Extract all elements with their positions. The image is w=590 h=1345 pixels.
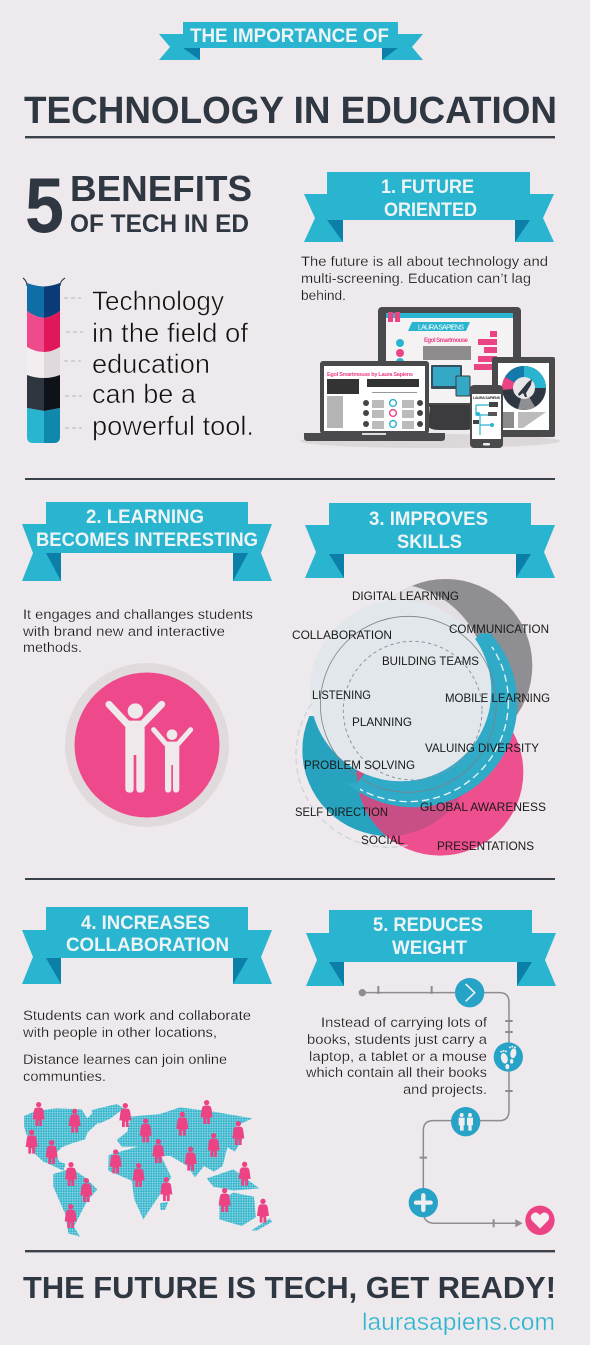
- ribbon: 5 reduces weight: 5. REDUCES: [373, 914, 483, 936]
- text: engages: with brand new and interactive: [22, 624, 225, 639]
- text: technology statement: education: [92, 349, 210, 379]
- skill labels: COLLABORATION: [292, 628, 392, 642]
- callout dashes: [64, 298, 83, 428]
- text: technology statement: [92, 286, 254, 441]
- ribbon: 1 future oriented: ORIENTED: [384, 199, 477, 221]
- ribbon: the importance of: [159, 22, 423, 60]
- phone: [470, 385, 503, 448]
- text: reduces weight: which contain all their books: [305, 1065, 487, 1080]
- phone: LAURA SAPIENS: [473, 396, 500, 400]
- footer website: laurasapiens.com: [362, 1309, 555, 1336]
- skill labels: LISTENING: [312, 688, 371, 702]
- ribbon: 4 increases collaboration: [22, 907, 272, 984]
- text: technology statement: Technology: [92, 286, 224, 316]
- text: collaboration: Distance learnes can join online: [23, 1052, 227, 1067]
- ribbon: 1 future oriented: [304, 172, 554, 242]
- laptop: Egol Smartmouse by Laura Sapiens: [327, 372, 413, 378]
- skill labels: [292, 589, 550, 853]
- ribbon: 3 improves skills: [305, 503, 555, 578]
- icon: two people: [451, 1107, 480, 1136]
- heading: 5 benefits of tech in ed: OF TECH IN ED: [70, 210, 249, 238]
- text: future: The future is all about technology and: [301, 254, 548, 269]
- laptop: [304, 361, 445, 441]
- devices illustration: [300, 307, 560, 448]
- icon: footprints: [494, 1042, 523, 1072]
- text: reduces weight: books, students just carry a: [307, 1032, 488, 1047]
- text: collaboration: communties.: [23, 1069, 106, 1084]
- skill labels: MOBILE LEARNING: [445, 691, 550, 705]
- ribbon: 5 reduces weight: [306, 910, 556, 986]
- text: technology statement: powerful tool.: [92, 411, 254, 441]
- ribbon: 1 future oriented: 1. FUTURE: [381, 176, 474, 198]
- ribbon: 4 increases collaboration: 4. INCREASES: [81, 912, 210, 934]
- monitor: LAURA SAPIENS: [418, 324, 464, 332]
- skill labels: SELF DIRECTION: [295, 805, 388, 819]
- ribbon: 5 reduces weight: WEIGHT: [392, 937, 467, 959]
- icon: chevron: [455, 978, 484, 1007]
- icon: parent and child: [65, 663, 229, 827]
- world map with people: [24, 1100, 272, 1237]
- heading: 5 benefits of tech in ed: [25, 161, 252, 249]
- text: collaboration: with people in other locations,: [22, 1025, 217, 1040]
- skill labels: VALUING DIVERSITY: [425, 741, 539, 755]
- ribbon: 3 improves skills: 3. IMPROVES: [369, 508, 488, 530]
- text: engages: It engages and challanges students: [23, 607, 253, 622]
- skill labels: PROBLEM SOLVING: [304, 758, 415, 772]
- text: reduces weight: laptop, a tablet or a mouse: [309, 1049, 487, 1064]
- text: engages: methods.: [23, 640, 82, 655]
- skill labels: COMMUNICATION: [449, 622, 549, 636]
- skill labels: PLANNING: [352, 715, 412, 729]
- skill labels: SOCIAL: [361, 833, 404, 847]
- text: future: [301, 254, 548, 303]
- ribbon: 3 improves skills: SKILLS: [397, 531, 462, 553]
- text: collaboration: Students can work and collaborate: [23, 1008, 251, 1023]
- text: reduces weight: and projects.: [403, 1082, 487, 1097]
- text: reduces weight: [305, 1015, 488, 1097]
- ribbon: 4 increases collaboration: COLLABORATION: [66, 934, 229, 956]
- icon: heart: [525, 1206, 555, 1235]
- text: engages: [22, 607, 253, 655]
- skill labels: DIGITAL LEARNING: [352, 589, 459, 603]
- text: technology statement: can be a: [92, 379, 197, 409]
- monitor: [378, 307, 521, 430]
- chart: skills venn diagram: [292, 579, 550, 856]
- skill labels: PRESENTATIONS: [437, 839, 534, 853]
- footer headline: THE FUTURE IS TECH, GET READY!: [23, 1270, 556, 1305]
- text: collaboration: [22, 1008, 251, 1084]
- icon: plus: [409, 1188, 438, 1217]
- title: TECHNOLOGY IN EDUCATION: [24, 90, 557, 132]
- ribbon: 2 learning becomes interesting: BECOMES INTERESTING: [36, 529, 258, 551]
- tablet: [492, 357, 555, 437]
- text: future: behind.: [301, 288, 346, 303]
- ribbon: the importance of: THE IMPORTANCE OF: [190, 25, 389, 47]
- heading: 5 benefits of tech in ed: BENEFITS: [70, 168, 252, 209]
- text: reduces weight: Instead of carrying lots of: [321, 1015, 487, 1030]
- ribbon: 2 learning becomes interesting: [22, 502, 272, 581]
- icon: striped tube: [23, 278, 65, 443]
- skill labels: GLOBAL AWARENESS: [420, 800, 546, 814]
- skill labels: BUILDING TEAMS: [382, 654, 479, 668]
- monitor: Egol Smartmouse: [424, 338, 469, 344]
- timeline path with icons: [359, 978, 555, 1235]
- ribbon: 2 learning becomes interesting: 2. LEARNING: [86, 506, 204, 528]
- text: technology statement: in the field of: [92, 318, 248, 348]
- text: future: multi-screening. Education can’t lag: [301, 271, 531, 286]
- heading: 5 benefits of tech in ed: 5: [25, 161, 64, 249]
